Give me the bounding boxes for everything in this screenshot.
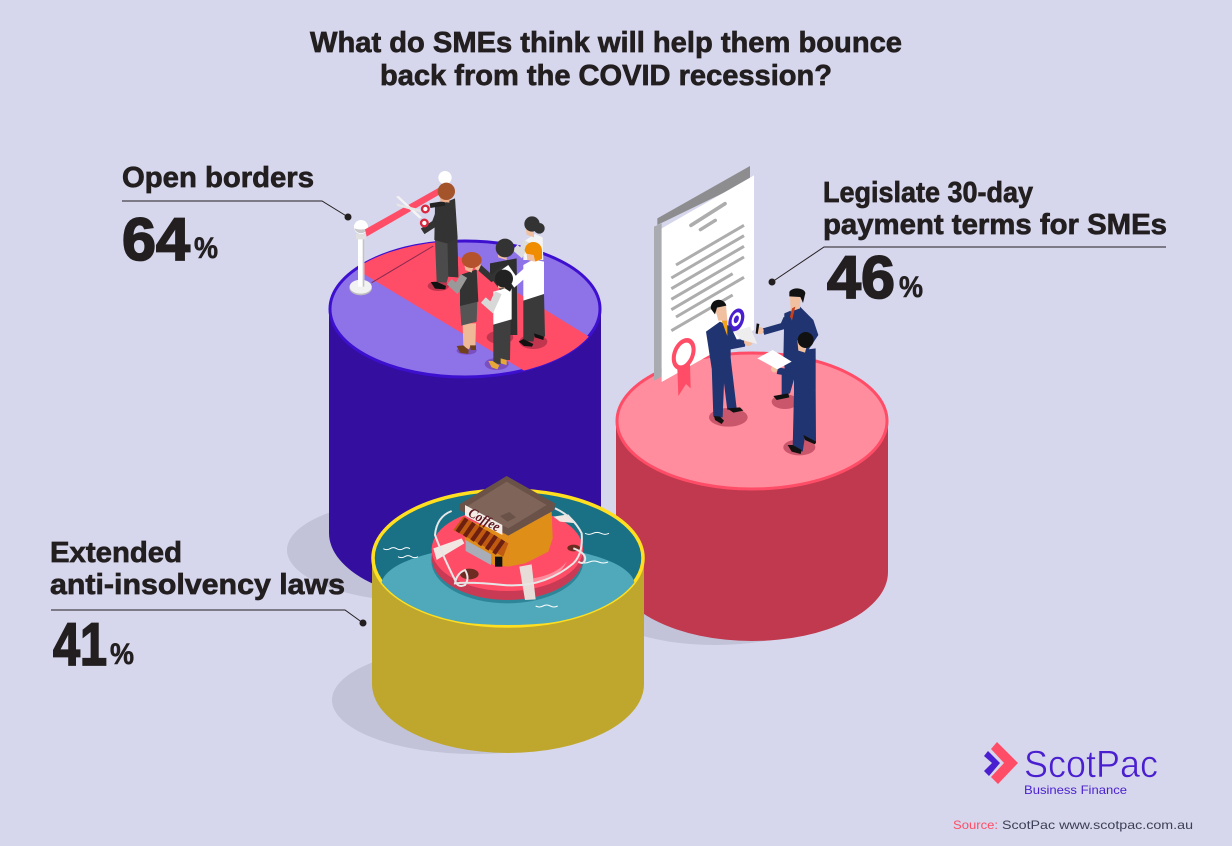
waves xyxy=(383,532,609,607)
awning xyxy=(453,517,508,557)
callout: anti-insolvency: % xyxy=(110,638,134,671)
sign xyxy=(465,505,502,535)
callout: anti-insolvency xyxy=(50,537,366,678)
callout: open borders: % xyxy=(194,232,218,265)
title xyxy=(310,27,902,92)
source note: Source: xyxy=(953,818,998,832)
rope xyxy=(435,508,585,586)
woman red hair xyxy=(449,252,482,355)
shadow: red cylinder xyxy=(595,555,835,645)
source note: ScotPac www.scotpac.com.au xyxy=(1002,818,1193,832)
coffee shop: Coffee xyxy=(465,506,502,535)
red ribbon xyxy=(365,188,439,237)
man with scissors xyxy=(396,183,458,291)
left post xyxy=(349,220,372,295)
illustration: coffee shop on a lifebuoy xyxy=(381,476,635,625)
callout: open borders xyxy=(122,162,352,273)
callout: payment terms: % xyxy=(899,271,923,304)
logo: ScotPac: Business Finance xyxy=(1024,783,1127,797)
cylinder: anti-insolvency xyxy=(372,490,644,753)
logo: ScotPac xyxy=(984,742,1158,797)
callout: payment terms: 46 xyxy=(827,244,895,311)
lifebuoy xyxy=(431,508,585,603)
businessman left xyxy=(706,300,757,427)
contract document xyxy=(654,166,754,396)
red carpet xyxy=(364,242,589,370)
roof xyxy=(459,476,555,536)
callout: anti-insolvency: anti-insolvency laws xyxy=(50,569,345,601)
woman black hair xyxy=(478,239,517,344)
callout: anti-insolvency: Extended xyxy=(50,537,182,569)
callout: payment terms: Legislate 30-day xyxy=(823,177,1033,209)
callout: anti-insolvency: 41 xyxy=(53,611,107,678)
coffee shop xyxy=(453,476,555,567)
shadow: purple cylinder xyxy=(287,498,563,602)
businessman right back xyxy=(756,288,818,409)
stamp xyxy=(725,306,747,334)
businessman front xyxy=(757,332,816,455)
woman white shirt xyxy=(483,270,513,370)
man orange hair xyxy=(505,242,547,349)
illustration: ribbon cutting team xyxy=(349,171,547,370)
ribbon seal xyxy=(677,363,691,396)
callout: payment terms xyxy=(768,177,1167,311)
logo: ScotPac: ScotPac xyxy=(1024,744,1158,786)
cylinder: open borders xyxy=(329,240,613,602)
woman at back xyxy=(515,216,545,260)
shadow: yellow cylinder xyxy=(332,646,618,754)
cylinder: payment terms xyxy=(616,353,888,641)
illustration: contract and businessmen xyxy=(654,166,818,455)
title: What do SMEs think will help them bounce xyxy=(310,27,902,59)
callout: payment terms: payment terms for SMEs xyxy=(823,209,1167,241)
callout: open borders: Open borders xyxy=(122,162,314,194)
water xyxy=(382,553,634,625)
callout: open borders: 64 xyxy=(122,206,191,273)
title: back from the COVID recession? xyxy=(380,60,832,92)
